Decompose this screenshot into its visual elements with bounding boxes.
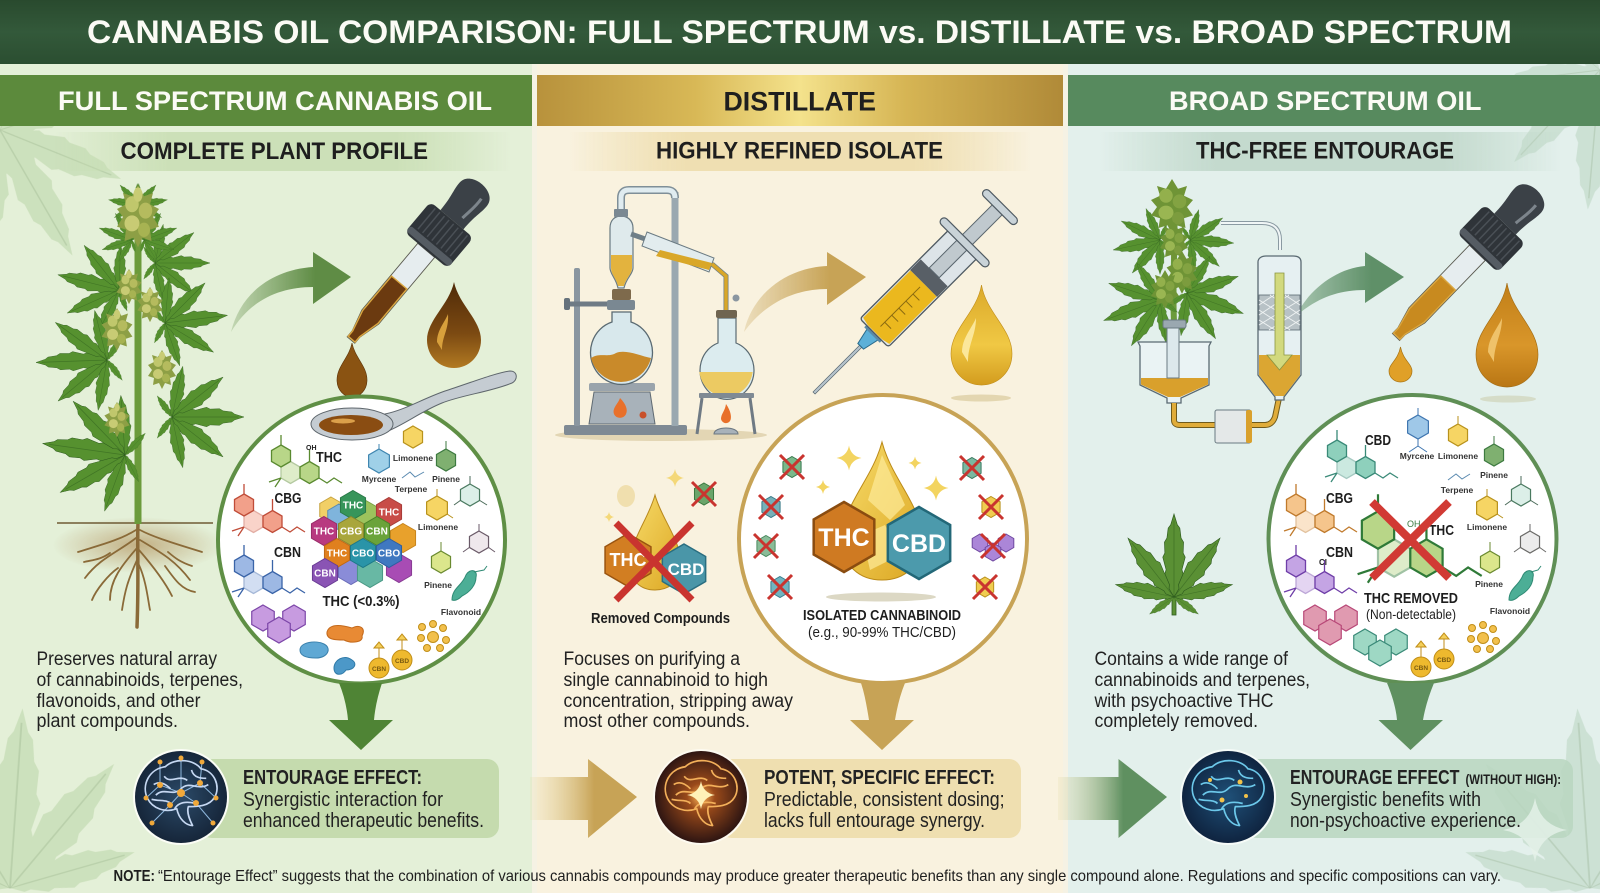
honeycomb of cannabinoids: CBO xyxy=(352,548,374,560)
subheading: THC-free entourage: THC-FREE ENTOURAGE xyxy=(1196,138,1454,164)
icon: dropper xyxy=(1376,171,1558,356)
callout: entourage effect: Synergistic interaction for xyxy=(243,789,443,811)
arrow: apparatus to syringe xyxy=(744,252,866,332)
subheading: complete plant profile: COMPLETE PLANT PROFILE xyxy=(120,138,428,165)
secondary terpene molecules: Pinene xyxy=(1475,579,1503,589)
arrow: distillate to broad spectrum xyxy=(1058,759,1167,838)
callout: entourage effect: ENTOURAGE EFFECT: xyxy=(243,767,422,789)
molecule: CBN: CBN xyxy=(1326,545,1353,561)
description text xyxy=(564,649,793,732)
secondary terpene molecules: Pinene xyxy=(424,580,452,590)
icon: distillation apparatus xyxy=(555,190,767,441)
icon: brain network xyxy=(133,749,229,845)
heading bar: distillate: DISTILLATE xyxy=(724,86,876,116)
icon: large oil drop xyxy=(427,282,481,368)
terpene labels: Terpene xyxy=(1441,485,1473,495)
terpene labels: Myrcene xyxy=(362,474,397,484)
title: CANNABIS OIL COMPARISON: FULL SPECTRUM vs. DISTILLATE vs. BROAD SPECTRUM xyxy=(87,14,1512,50)
icon: gold crystal drop xyxy=(826,442,936,602)
terpene labels xyxy=(1400,408,1508,495)
removed compounds graphic: CBD xyxy=(668,560,704,579)
arrow: down to entourage effect xyxy=(329,683,393,750)
molecule: CBN xyxy=(1284,545,1357,597)
arrow: down to potent effect xyxy=(850,683,914,750)
arrow: filter to dropper xyxy=(1301,252,1404,312)
icon: plant with filtration apparatus xyxy=(1089,179,1301,443)
label: THC removed: THC REMOVED xyxy=(1364,590,1458,607)
terpene labels xyxy=(362,426,460,494)
subheading: highly refined isolate: HIGHLY REFINED ISOLATE xyxy=(656,138,943,164)
terpene labels: Myrcene xyxy=(1400,451,1435,461)
column: distillate xyxy=(530,75,1063,845)
label: THC removed xyxy=(1364,590,1458,622)
molecule: CBD: CBD xyxy=(1365,433,1391,449)
molecule: CBN xyxy=(232,545,305,597)
secondary terpene molecules xyxy=(1467,476,1546,616)
footnote: “Entourage Effect” suggests that the combination of various cannabis compounds may produce greater therapeutic benefits than any single compound alone. Regulations and specific compositions can vary. xyxy=(158,868,1501,885)
flavonoid and compound icons: CBD xyxy=(395,658,409,665)
secondary terpene molecules: Limonene xyxy=(418,522,458,532)
chart: isolated cannabinoid circle xyxy=(739,395,1027,683)
footnote: NOTE: xyxy=(114,868,155,885)
description text: Preserves natural array xyxy=(36,649,217,670)
icon: dropper xyxy=(330,166,503,358)
description text: completely removed. xyxy=(1094,711,1258,732)
panel: broad spectrum background xyxy=(1068,64,1600,893)
subheading: THC-free entourage xyxy=(1100,132,1560,171)
sparkles xyxy=(816,446,948,500)
heading bar: full spectrum xyxy=(0,75,532,126)
terpene labels: Limonene xyxy=(1438,451,1478,461)
icon: large amber drop xyxy=(1476,283,1538,402)
callout: potent specific effect: lacks full entourage synergy. xyxy=(764,810,985,832)
chart: isolated cannabinoid circle: ISOLATED CANNABINOID xyxy=(803,608,961,624)
description text: most other compounds. xyxy=(564,711,750,732)
terpene labels: Pinene xyxy=(1480,470,1508,480)
icon: small oil drop xyxy=(337,343,367,397)
flavonoid and compound icons xyxy=(252,605,450,678)
description text: with psychoactive THC xyxy=(1094,691,1274,712)
removed compounds graphic: Removed Compounds xyxy=(591,611,730,627)
molecule: THC: OH xyxy=(306,445,316,452)
honeycomb of cannabinoids: THC xyxy=(314,526,334,538)
flavonoid and compound icons: CBN xyxy=(372,666,386,673)
secondary terpene molecules xyxy=(418,476,495,617)
callout: entourage effect without high: ENTOURAGE EFFECT xyxy=(1290,767,1460,789)
panel: distillate background xyxy=(537,64,1063,893)
hex: CBD xyxy=(888,507,950,579)
icon: glowing brain xyxy=(653,749,749,845)
description text xyxy=(36,649,243,732)
description text: cannabinoids and terpenes, xyxy=(1094,670,1310,691)
title banner xyxy=(0,0,1600,64)
description text: single cannabinoid to high xyxy=(564,670,768,691)
callout: potent specific effect: POTENT, SPECIFIC EFFECT: xyxy=(764,767,995,789)
honeycomb of cannabinoids: THC xyxy=(379,508,399,518)
column: broad spectrum xyxy=(1058,75,1600,862)
description text xyxy=(1094,649,1310,732)
arrow: full spectrum to distillate xyxy=(530,759,637,838)
terpene labels: Limonene xyxy=(393,453,433,463)
icon: blue glowing brain xyxy=(1180,749,1276,845)
subheading: complete plant profile xyxy=(55,132,510,171)
removed THC molecule xyxy=(1358,494,1482,583)
description text: concentration, stripping away xyxy=(564,691,793,712)
chart: compound circle xyxy=(218,371,516,684)
label: THC removed: (Non-detectable) xyxy=(1366,607,1456,622)
molecule: CBN: CBN xyxy=(274,545,301,561)
callout: entourage effect without high: non-psychoactive experience. xyxy=(1290,810,1521,832)
honeycomb of cannabinoids xyxy=(311,490,416,588)
subheading: highly refined isolate xyxy=(570,132,1030,171)
icon: syringe xyxy=(791,181,1026,416)
description text: Focuses on purifying a xyxy=(564,649,740,670)
secondary terpene molecules: Limonene xyxy=(1467,522,1507,532)
molecule: CBN: Cl xyxy=(1319,558,1327,567)
description text: flavonoids, and other xyxy=(36,691,201,712)
removed compounds graphic: THC xyxy=(610,550,646,570)
molecule: THC: THC xyxy=(316,450,342,466)
heading bar: broad spectrum xyxy=(1068,75,1600,126)
heading bar: distillate xyxy=(537,75,1063,126)
icon: small amber drop xyxy=(1389,347,1412,382)
terpene labels: Terpene xyxy=(395,484,427,494)
flavonoid and compound icons: CBD xyxy=(1437,657,1451,664)
hex: CBD: CBD xyxy=(892,530,946,558)
honeycomb of cannabinoids: CBN xyxy=(314,568,336,580)
honeycomb of cannabinoids: THC xyxy=(343,500,363,512)
flavonoid and compound icons: CBN xyxy=(1414,665,1428,672)
honeycomb of cannabinoids: CBG xyxy=(340,526,362,538)
flavonoid and compound icons xyxy=(1304,605,1500,677)
honeycomb of cannabinoids: THC xyxy=(327,548,347,560)
description text: of cannabinoids, terpenes, xyxy=(36,670,243,691)
callout: potent specific effect xyxy=(653,749,1021,845)
callout: entourage effect without high: Synergistic benefits with xyxy=(1290,789,1481,811)
molecule: CBD xyxy=(1325,430,1398,482)
callout: entourage effect: enhanced therapeutic benefits. xyxy=(243,810,484,832)
icon: cannabis leaf xyxy=(1114,514,1234,617)
callout: potent specific effect: Predictable, consistent dosing; xyxy=(764,789,1004,811)
chart: isolated cannabinoid circle: (e.g., 90-99% THC/CBD) xyxy=(808,625,956,641)
heading bar: broad spectrum: BROAD SPECTRUM OIL xyxy=(1169,86,1482,116)
icon: spoon with oil xyxy=(311,371,516,440)
terpene labels: Pinene xyxy=(432,474,460,484)
description text: plant compounds. xyxy=(36,711,178,732)
hex: THC: THC xyxy=(818,524,870,552)
hex: THC xyxy=(814,502,874,572)
removed THC molecule: THC xyxy=(1429,522,1454,539)
honeycomb of cannabinoids: CBO xyxy=(378,548,400,560)
removed compounds graphic xyxy=(591,469,730,627)
arrow: down to entourage without high xyxy=(1378,683,1443,750)
column: full spectrum xyxy=(0,75,532,845)
molecule: CBG xyxy=(1284,484,1357,536)
heading bar: full spectrum: FULL SPECTRUM CANNABIS OIL xyxy=(58,86,492,116)
icon: gold oil drop xyxy=(951,285,1012,402)
panel: full spectrum background xyxy=(0,64,532,893)
molecule: CBG: CBG xyxy=(274,491,302,507)
molecule: THC xyxy=(269,435,342,487)
callout: entourage effect xyxy=(133,749,499,845)
removed molecules crossed out xyxy=(754,455,1014,599)
label: THC under 0.3 percent: THC (<0.3%) xyxy=(322,593,400,610)
chart: THC-free compound circle xyxy=(1268,395,1556,683)
arrow: plant to oil xyxy=(231,252,351,332)
callout: entourage effect without high: (WITHOUT HIGH): xyxy=(1466,771,1561,787)
secondary terpene molecules: Flavonoid xyxy=(1490,606,1530,616)
removed THC molecule: OH xyxy=(1407,519,1420,529)
background leaves right xyxy=(1466,64,1600,892)
description text: Contains a wide range of xyxy=(1094,649,1289,670)
icon: cannabis plant with roots xyxy=(34,178,244,627)
honeycomb of cannabinoids: CBN xyxy=(366,526,388,538)
callout: entourage effect without high xyxy=(1180,749,1573,862)
secondary terpene molecules: Flavonoid xyxy=(441,607,481,617)
molecule: CBG: CBG xyxy=(1326,491,1353,507)
molecule: CBG xyxy=(232,484,305,536)
background leaves left xyxy=(0,126,134,892)
